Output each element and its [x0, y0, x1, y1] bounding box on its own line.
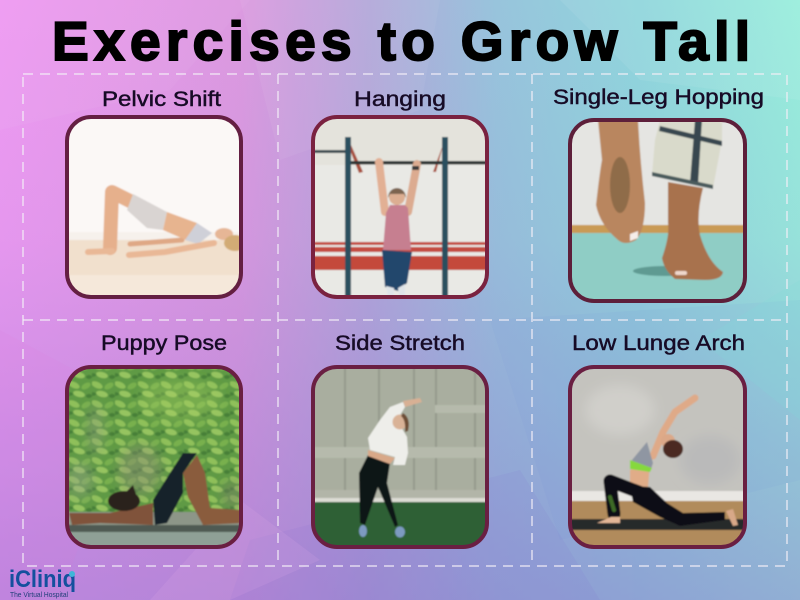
photo: low lunge arch: [568, 365, 747, 549]
panel: Pelvic Shift: [65, 88, 246, 299]
heading: Low Lunge Arch: Low Lunge Arch: [572, 332, 745, 355]
panel: Side Stretch: [311, 332, 489, 549]
heading: Pelvic Shift: Pelvic Shift: [102, 88, 221, 111]
photo: pelvic shift pose: [65, 115, 246, 299]
photo: puppy pose: [65, 365, 243, 549]
logo: iCliniq: The Virtual Hospital: [10, 590, 68, 599]
photo: side stretch: [311, 365, 489, 549]
title: Exercises to Grow Tall: [52, 10, 750, 72]
panel: Low Lunge Arch: [568, 332, 747, 549]
heading: Puppy Pose: Puppy Pose: [101, 332, 227, 355]
heading: Hanging: Hanging: [354, 88, 446, 111]
heading: Single-Leg Hopping: Single-Leg Hopping: [553, 86, 764, 109]
photo: hanging from a bar: [311, 115, 489, 299]
panel: Puppy Pose: [65, 332, 243, 549]
heading: Side Stretch: Side Stretch: [335, 332, 465, 355]
dashed grid: [23, 74, 787, 566]
logo: iCliniq: iCliniq: [9, 566, 76, 593]
photo: single-leg hopping feet: [568, 118, 747, 303]
panel: Hanging: [311, 88, 489, 299]
panel: Single-Leg Hopping: [553, 86, 764, 303]
